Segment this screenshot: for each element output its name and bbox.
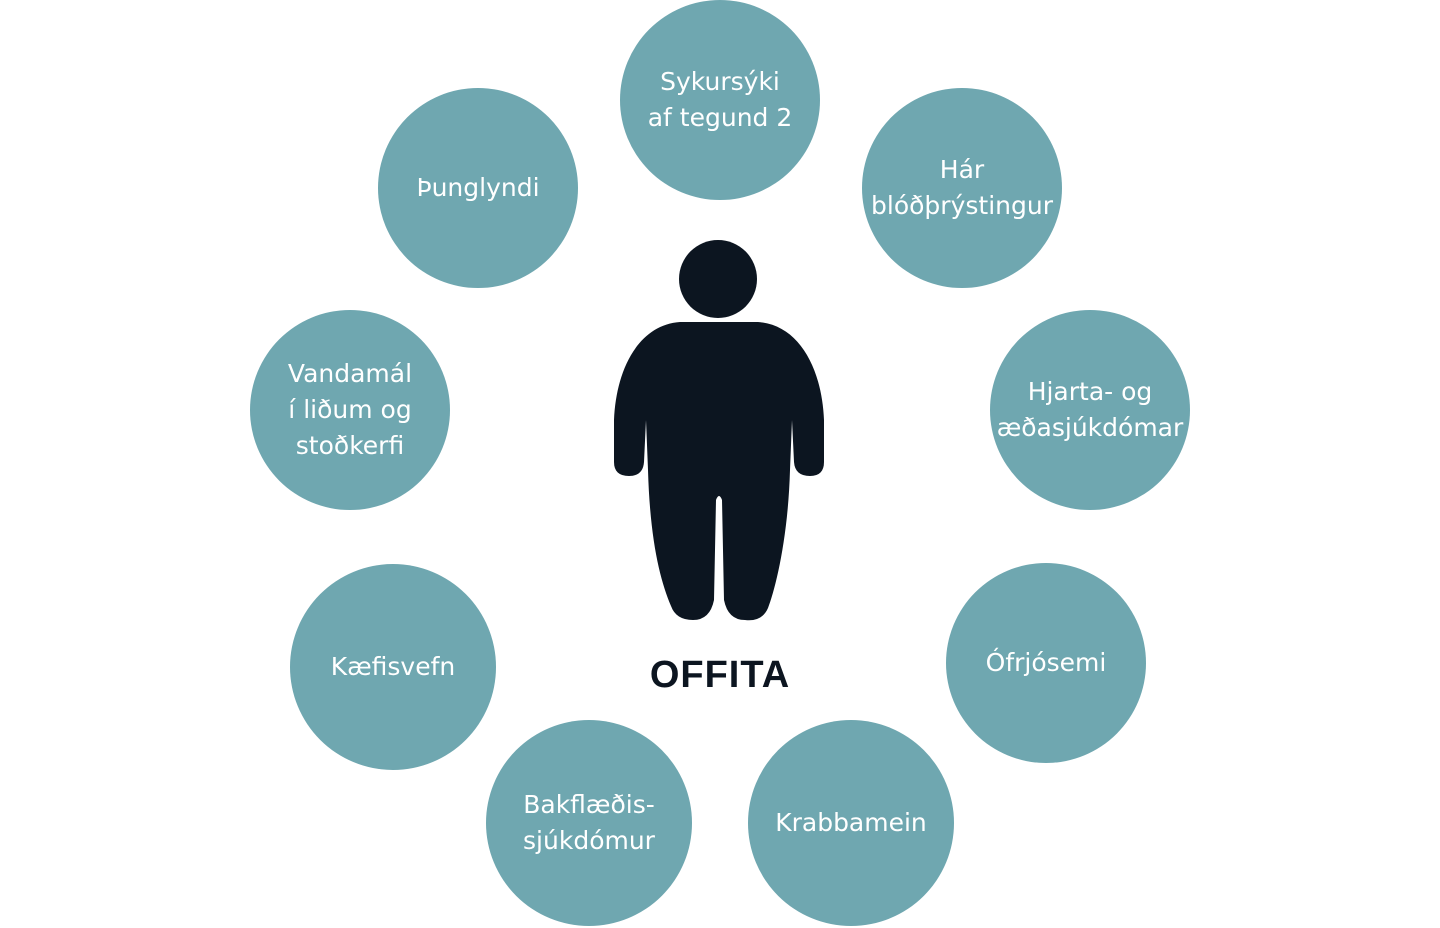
circle: Vandamál í liðum og stoðkerfi: Vandamál	[288, 359, 412, 388]
circle: Hjarta- og æðasjúkdómar: æðasjúkdómar	[997, 413, 1183, 442]
circle: Kæfisvefn: Kæfisvefn	[331, 652, 455, 681]
circle: Vandamál í liðum og stoðkerfi: stoðkerfi	[296, 431, 404, 460]
circle: Þunglyndi	[378, 88, 578, 288]
title: OFFITA: OFFITA	[650, 654, 790, 696]
circle: Bakflæðissjúkdómur: Bakflæðis-	[523, 790, 655, 819]
circle: Kæfisvefn	[290, 564, 496, 770]
circle: Sykursýki af tegund 2: Sykursýki	[660, 67, 780, 96]
circle: Krabbamein	[748, 720, 954, 926]
circle: Vandamál í liðum og stoðkerfi	[250, 310, 450, 510]
circle: Sykursýki af tegund 2	[620, 0, 820, 200]
circle: Hár blóðþrýstingur	[862, 88, 1062, 288]
circle: Bakflæðissjúkdómur: sjúkdómur	[523, 826, 655, 855]
circle: Ófrjósemi	[946, 563, 1146, 763]
circle: Hjarta- og æðasjúkdómar	[990, 310, 1190, 510]
circle: Hár blóðþrýstingur: blóðþrýstingur	[871, 191, 1053, 220]
circle: Ófrjósemi: Ófrjósemi	[986, 648, 1106, 677]
circle: Hár blóðþrýstingur: Hár	[940, 155, 984, 184]
circle: Bakflæðissjúkdómur	[486, 720, 692, 926]
circle: Vandamál í liðum og stoðkerfi: í liðum og	[288, 395, 412, 424]
circle: Krabbamein: Krabbamein	[775, 808, 927, 837]
circle: Hjarta- og æðasjúkdómar: Hjarta- og	[1028, 377, 1152, 406]
circle: Sykursýki af tegund 2: af tegund 2	[648, 103, 792, 132]
circle: Þunglyndi: Þunglyndi	[416, 173, 540, 202]
